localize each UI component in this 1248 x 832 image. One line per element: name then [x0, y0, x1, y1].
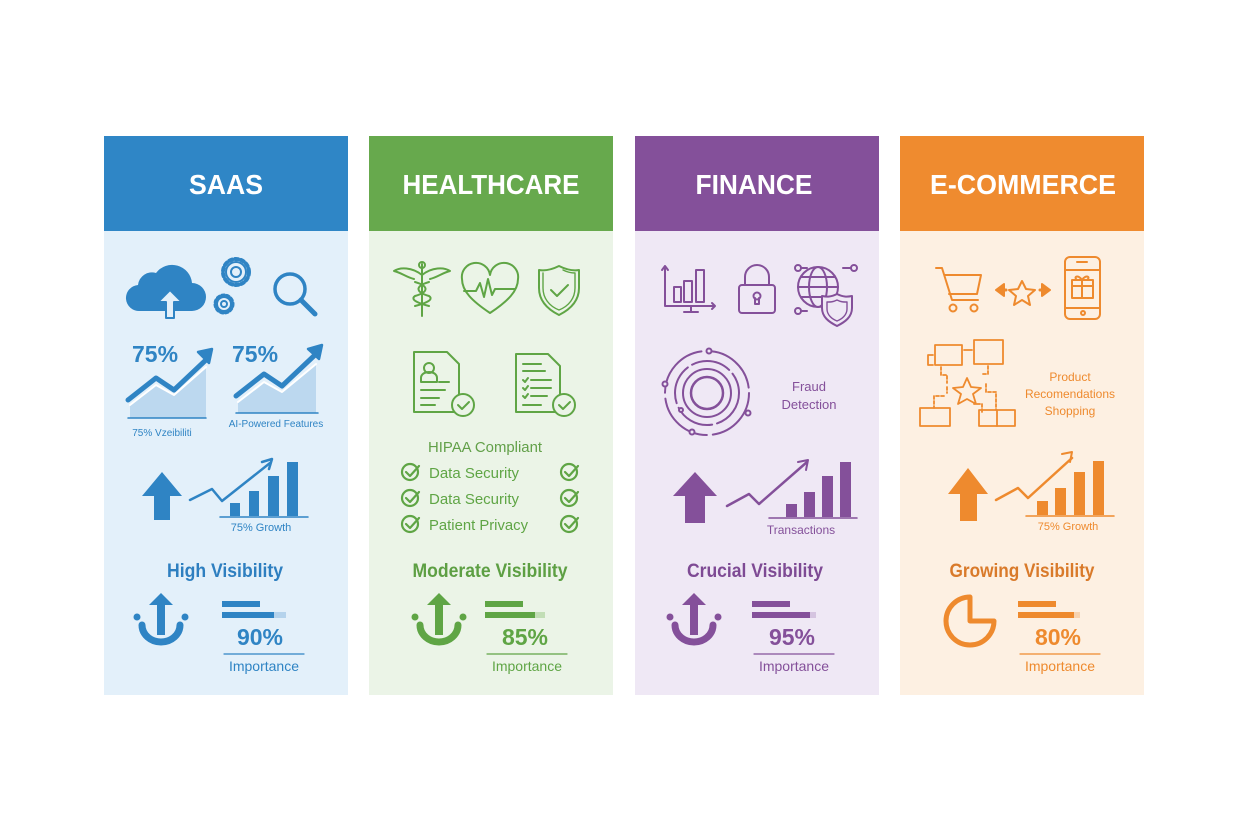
metric: 95% importance: 95%: [769, 624, 815, 650]
chart: 75% visibility: 75%: [132, 341, 178, 367]
heading: Healthcare: [369, 136, 613, 231]
icon: globe shield: [795, 265, 857, 326]
text: product recommendations: Recomendations: [1025, 387, 1115, 401]
icon: caduceus: [394, 262, 450, 316]
heading: E-commerce: [900, 136, 1144, 231]
chart: growth: [948, 452, 1114, 533]
icon: fraud detection rings: [662, 348, 750, 435]
text: HIPAA compliant checklist: Patient Privacy: [429, 517, 528, 534]
icon: anchor: [666, 593, 722, 642]
panel: E-commerce: [900, 136, 1144, 695]
metric: 90% importance: 90%: [237, 624, 283, 650]
icon: cloud upload: [126, 265, 206, 318]
chart: growth: 75% Growth: [231, 522, 291, 534]
text: crucial visibility: Crucial Visibility: [687, 561, 823, 582]
metric: 80% importance: 80%: [1035, 624, 1081, 650]
chart: AI-powered features: AI-Powered Features: [229, 419, 323, 430]
heading: Healthcare: HEALTHCARE: [402, 169, 580, 200]
icon: star arrows: [996, 281, 1050, 305]
text: fraud detection: Detection: [782, 397, 836, 412]
text: growing visibility: Growing Visibility: [950, 561, 1095, 582]
metric: 80% importance: Importance: [1025, 658, 1095, 674]
icon: shopping cart: [936, 268, 981, 312]
chart: growth: 75% Growth: [1038, 521, 1098, 533]
text: HIPAA compliant checklist: Data Security: [429, 491, 519, 508]
icon: shield check: [539, 266, 579, 315]
heading: SaaS: SAAS: [189, 169, 263, 200]
icon: bar chart monitor: [662, 266, 715, 312]
icon: anchor: [134, 593, 188, 642]
metric: 85% importance: 85%: [502, 624, 548, 650]
chart: transactions growth: [673, 460, 857, 537]
chart: AI-powered features: [229, 341, 323, 430]
chart: transactions growth: Transactions: [767, 523, 835, 537]
text: moderate visibility: Moderate Visibility: [412, 561, 568, 582]
chart: 75% visibility: [128, 341, 212, 439]
icon: pie chart: [946, 597, 994, 645]
metric: 90% importance: Importance: [229, 658, 299, 674]
heading: Finance: FINANCE: [696, 169, 812, 200]
text: product recommendations: Product: [1049, 370, 1091, 384]
text: product recommendations: Shopping: [1045, 404, 1095, 418]
icon: padlock: [739, 265, 775, 313]
panel: SaaS: [104, 136, 348, 695]
icon: heart pulse: [462, 263, 518, 313]
icon: patient document: [414, 352, 474, 416]
chart: AI-powered features: 75%: [232, 341, 278, 367]
metric: 95% importance: Importance: [759, 658, 829, 674]
metric: 85% importance: Importance: [492, 658, 562, 674]
panel: Healthcare: [369, 136, 613, 695]
icon: phone gift: [1065, 257, 1100, 319]
icon: magnifier: [275, 274, 315, 314]
heading: SaaS: [104, 136, 348, 231]
icon: recommendation flowchart: [920, 340, 1015, 426]
text: HIPAA compliant checklist: HIPAA Compliant: [428, 439, 543, 456]
heading: Finance: [635, 136, 879, 231]
text: high visibility: High Visibility: [167, 561, 283, 582]
metric: 90% importance: [222, 601, 304, 674]
icon: checklist document: [516, 354, 575, 416]
heading: E-commerce: E-COMMERCE: [930, 169, 1116, 200]
metric: 95% importance: [752, 601, 834, 674]
text: HIPAA compliant checklist: Data Security: [429, 465, 519, 482]
text: HIPAA compliant checklist: [402, 439, 578, 534]
metric: 80% importance: [1018, 601, 1100, 674]
icon: gears: [215, 259, 249, 313]
icon: anchor: [412, 593, 466, 642]
chart: growth: [142, 459, 308, 534]
text: fraud detection: Fraud: [792, 379, 826, 394]
chart: 75% visibility: 75% Vzeibiliti: [132, 428, 192, 439]
metric: 85% importance: [485, 601, 567, 674]
panel: Finance: [635, 136, 879, 695]
